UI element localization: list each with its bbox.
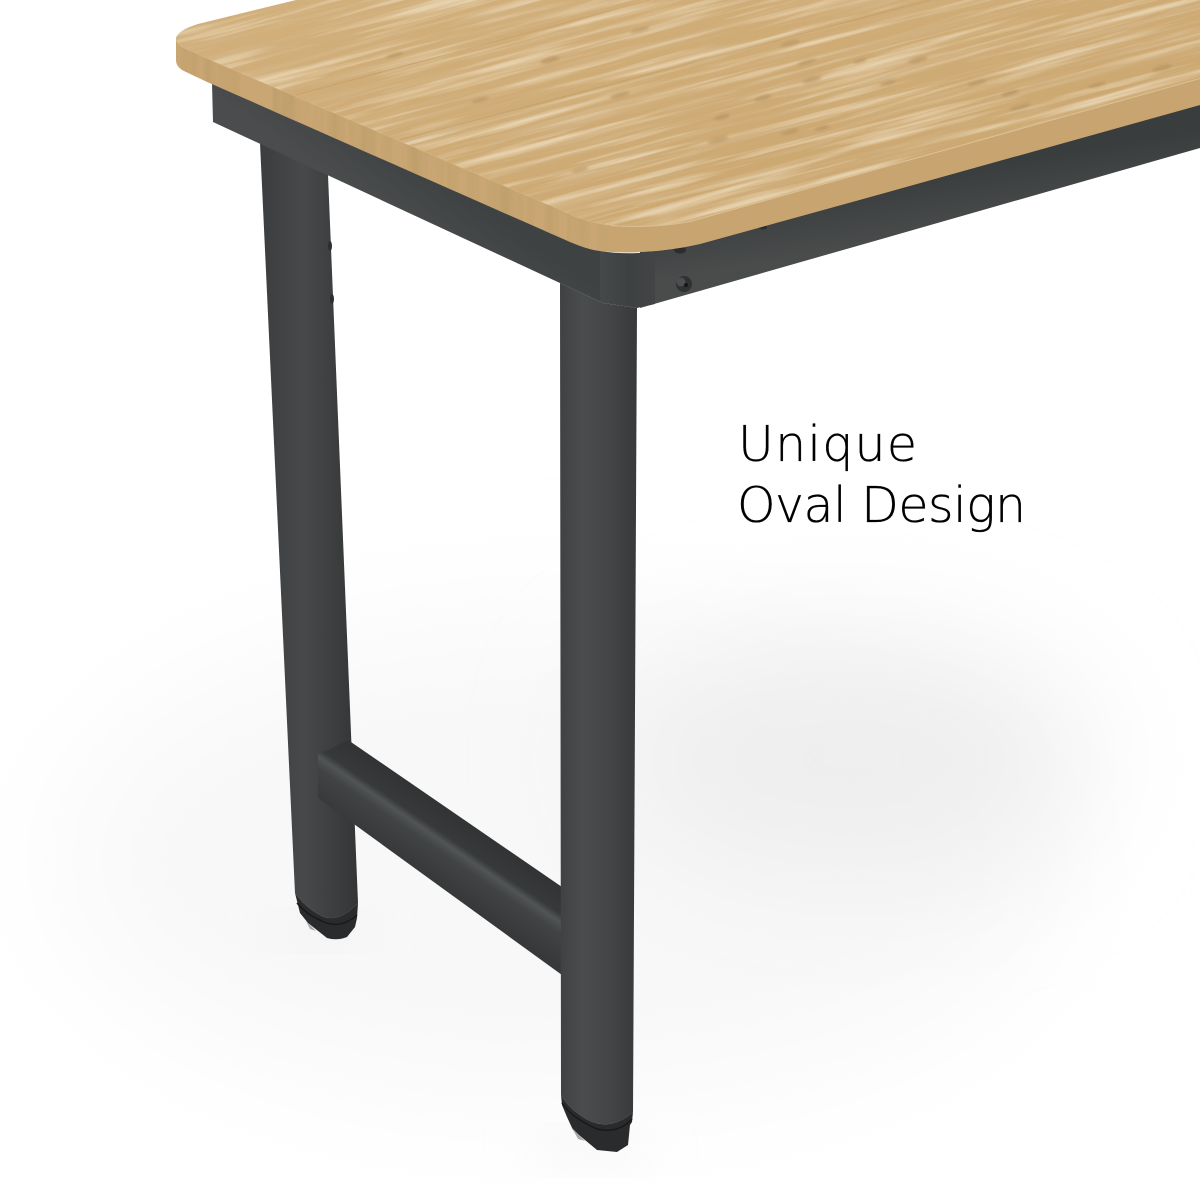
adjustment bolts on back leg (328, 241, 334, 304)
caption: Oval Design (737, 477, 1026, 534)
back leg (260, 143, 358, 939)
front foot glide (561, 1095, 633, 1152)
frame corner piece (600, 251, 655, 308)
tabletop edge (176, 40, 1200, 252)
bamboo knots (386, 25, 1172, 174)
apron: metal frame under tabletop (212, 83, 1200, 308)
floor shadow (60, 620, 1090, 1164)
plank seams (296, 0, 930, 140)
crossbar (318, 740, 562, 975)
tabletop surface (176, 0, 1200, 226)
screw under top (674, 246, 686, 254)
caption: Unique (738, 416, 917, 473)
caption (737, 416, 1026, 534)
bolt on apron (676, 276, 692, 292)
front leg (560, 283, 637, 1152)
back foot glide (295, 893, 358, 939)
tabletop (176, 0, 1200, 252)
